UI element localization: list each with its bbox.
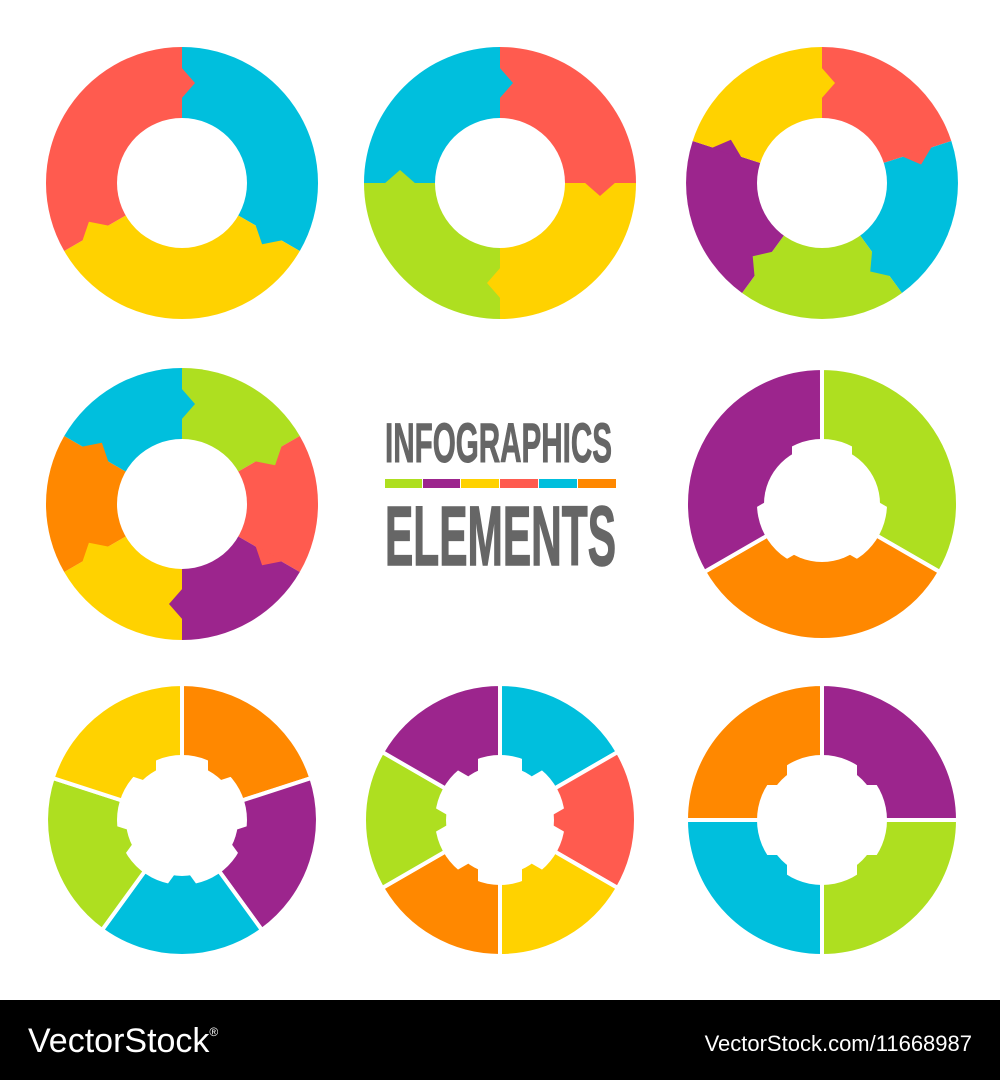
footer logo: VectorStock <box>28 1022 209 1060</box>
donut: 5 segments with arrows <box>637 18 991 369</box>
footer logo: ® <box>209 1025 218 1039</box>
donut: 3 segments with arrows <box>0 31 318 369</box>
title: ELEMENTS <box>385 489 616 583</box>
donut: 4 segments with gaps <box>686 684 958 956</box>
footer bar <box>0 1000 1000 1080</box>
color bar <box>385 479 616 488</box>
donut: 3 segments with gaps <box>688 370 956 638</box>
donut: 4 segments with arrows <box>364 47 636 319</box>
donut: 6 segments with arrows <box>5 334 359 674</box>
donut: 6 segments with gaps <box>366 686 634 954</box>
title: INFOGRAPHICS <box>385 411 612 474</box>
footer url: VectorStock.com/11668987 <box>705 1031 972 1056</box>
donut: 5 segments with gaps <box>48 686 316 954</box>
title <box>385 411 616 583</box>
